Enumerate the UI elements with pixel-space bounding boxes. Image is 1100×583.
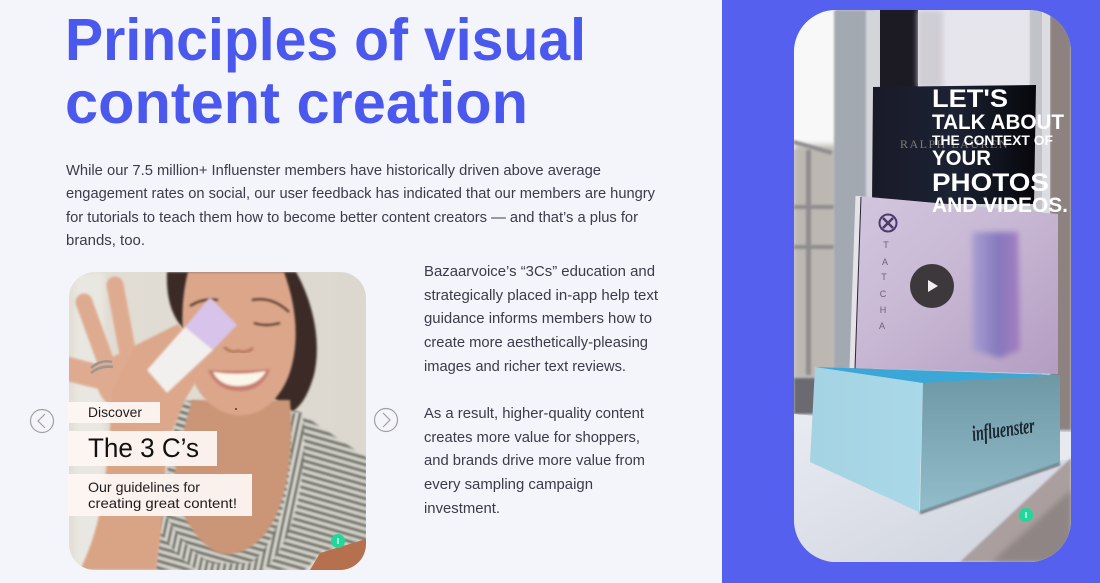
caption: let's talk about your photos and videos: AND VIDEOS. bbox=[932, 194, 1068, 217]
video: ledge brown corner bbox=[960, 458, 1071, 562]
photo: smile bbox=[208, 369, 270, 391]
video: window frame bbox=[834, 10, 874, 380]
video: pale wall bbox=[918, 10, 1030, 88]
photo: product bottle bbox=[147, 297, 237, 393]
video: ledge white edge bbox=[1060, 432, 1071, 460]
panel: video phone card bbox=[793, 10, 1071, 562]
label: guidelines: Our guidelines for bbox=[88, 479, 200, 495]
video: dark box bbox=[872, 85, 1036, 204]
video: bottle on box bbox=[972, 232, 1020, 358]
video: window pane bars bbox=[793, 140, 834, 375]
video: Tatcha logo and lettering: A bbox=[882, 257, 888, 267]
photo: left column bbox=[74, 272, 104, 570]
text block: result: creates more value for shoppers, bbox=[424, 429, 640, 446]
photo: hair bbox=[167, 272, 317, 412]
intro paragraph bbox=[66, 162, 655, 249]
intro paragraph: for tutorials to teach them how to become better content creators — and that’s a plus for bbox=[66, 209, 638, 226]
title: content creation bbox=[65, 70, 528, 136]
photo: shirt sleeve seam bbox=[160, 413, 297, 570]
caption: let's talk about your photos and videos: YOUR bbox=[932, 147, 991, 170]
icon: green info dot bbox=[1019, 508, 1033, 522]
video: black strip bbox=[880, 10, 918, 90]
caption: let's talk about your photos and videos: LET'S bbox=[932, 85, 1008, 113]
photo: wall background bbox=[69, 272, 366, 570]
text block: 3Cs education bbox=[424, 263, 659, 375]
text block: 3Cs education: guidance informs members how to bbox=[424, 310, 652, 327]
video: brown right edge bbox=[1050, 10, 1071, 430]
caption: let's talk about your photos and videos: TALK ABOUT bbox=[932, 111, 1064, 134]
video: Tatcha logo and lettering bbox=[879, 214, 896, 331]
text block: result: As a result, higher-quality content bbox=[424, 405, 645, 422]
photo: neck and chest bbox=[172, 400, 291, 554]
photo: mole bbox=[235, 408, 237, 410]
photo: hand and fingers bbox=[64, 285, 208, 432]
label: The 3 C's bbox=[68, 431, 217, 466]
video: blue box right face bbox=[920, 375, 1060, 512]
photo: eyebrows and closed eye bbox=[190, 299, 289, 325]
intro paragraph: engagement rates on social, our user feedback has indicated that our members are hungry bbox=[66, 185, 655, 202]
video: dark sill band bbox=[794, 378, 818, 414]
icon: green info dot bbox=[331, 534, 345, 548]
caption: let's talk about your photos and videos bbox=[932, 85, 1068, 217]
video: blue box top strip bbox=[815, 367, 1060, 384]
photo: face bbox=[182, 272, 296, 415]
video: Tatcha logo and lettering: A bbox=[879, 321, 885, 331]
panel: carousel photo card bbox=[64, 272, 367, 570]
title: Principles of visual bbox=[65, 7, 586, 73]
photo: ring bbox=[91, 361, 113, 373]
text block: result bbox=[424, 405, 645, 517]
video: box brand text: RALPH LAUREN bbox=[900, 137, 1009, 151]
label: Discover: Discover bbox=[88, 404, 142, 420]
intro paragraph: brands, too. bbox=[66, 232, 145, 249]
video: Tatcha logo and lettering: T bbox=[881, 272, 887, 282]
video: Tatcha box bbox=[852, 196, 1058, 374]
title bbox=[65, 7, 586, 136]
video: window ledge bbox=[794, 414, 1071, 562]
text block: result: and brands drive more value from bbox=[424, 452, 645, 469]
text block: 3Cs education: images and richer text reviews. bbox=[424, 358, 626, 375]
intro paragraph: While our 7.5 million+ Influenster members have historically driven above average bbox=[66, 162, 601, 179]
photo: striped shirt bbox=[155, 400, 367, 570]
video: influenster logo: influenster bbox=[970, 412, 1036, 446]
label: The 3 C's: The 3 C’s bbox=[88, 433, 199, 463]
label: guidelines bbox=[68, 474, 252, 516]
video: Tatcha logo and lettering: T bbox=[883, 240, 889, 250]
video: Tatcha logo and lettering: H bbox=[880, 305, 886, 315]
video: window background bbox=[794, 10, 1071, 562]
label: Discover bbox=[68, 402, 160, 423]
caption: let's talk about your photos and videos: PHOTOS bbox=[932, 169, 1049, 197]
text block: result: every sampling campaign bbox=[424, 476, 593, 493]
label: guidelines: creating great content! bbox=[88, 495, 237, 511]
video: blue box left face bbox=[810, 367, 923, 512]
photo: right arm bbox=[310, 539, 366, 570]
icon: previous arrow bbox=[30, 410, 54, 432]
text block: 3Cs education: create more aesthetically-pleasing bbox=[424, 334, 648, 351]
icon: play button bbox=[910, 264, 954, 308]
photo: left arm bbox=[80, 420, 166, 570]
text block: 3Cs education: strategically placed in-app help text bbox=[424, 287, 659, 304]
caption: let's talk about your photos and videos: THE CONTEXT OF bbox=[932, 132, 1053, 148]
text block: 3Cs education: Bazaarvoice’s “3Cs” education and bbox=[424, 263, 655, 280]
photo: nose shadow bbox=[224, 347, 253, 352]
panel: right blue background bbox=[722, 0, 1100, 583]
icon: next arrow bbox=[374, 408, 398, 432]
video: Tatcha logo and lettering: C bbox=[880, 289, 887, 299]
text block: result: investment. bbox=[424, 500, 500, 517]
video: box shadow bbox=[920, 464, 1060, 513]
